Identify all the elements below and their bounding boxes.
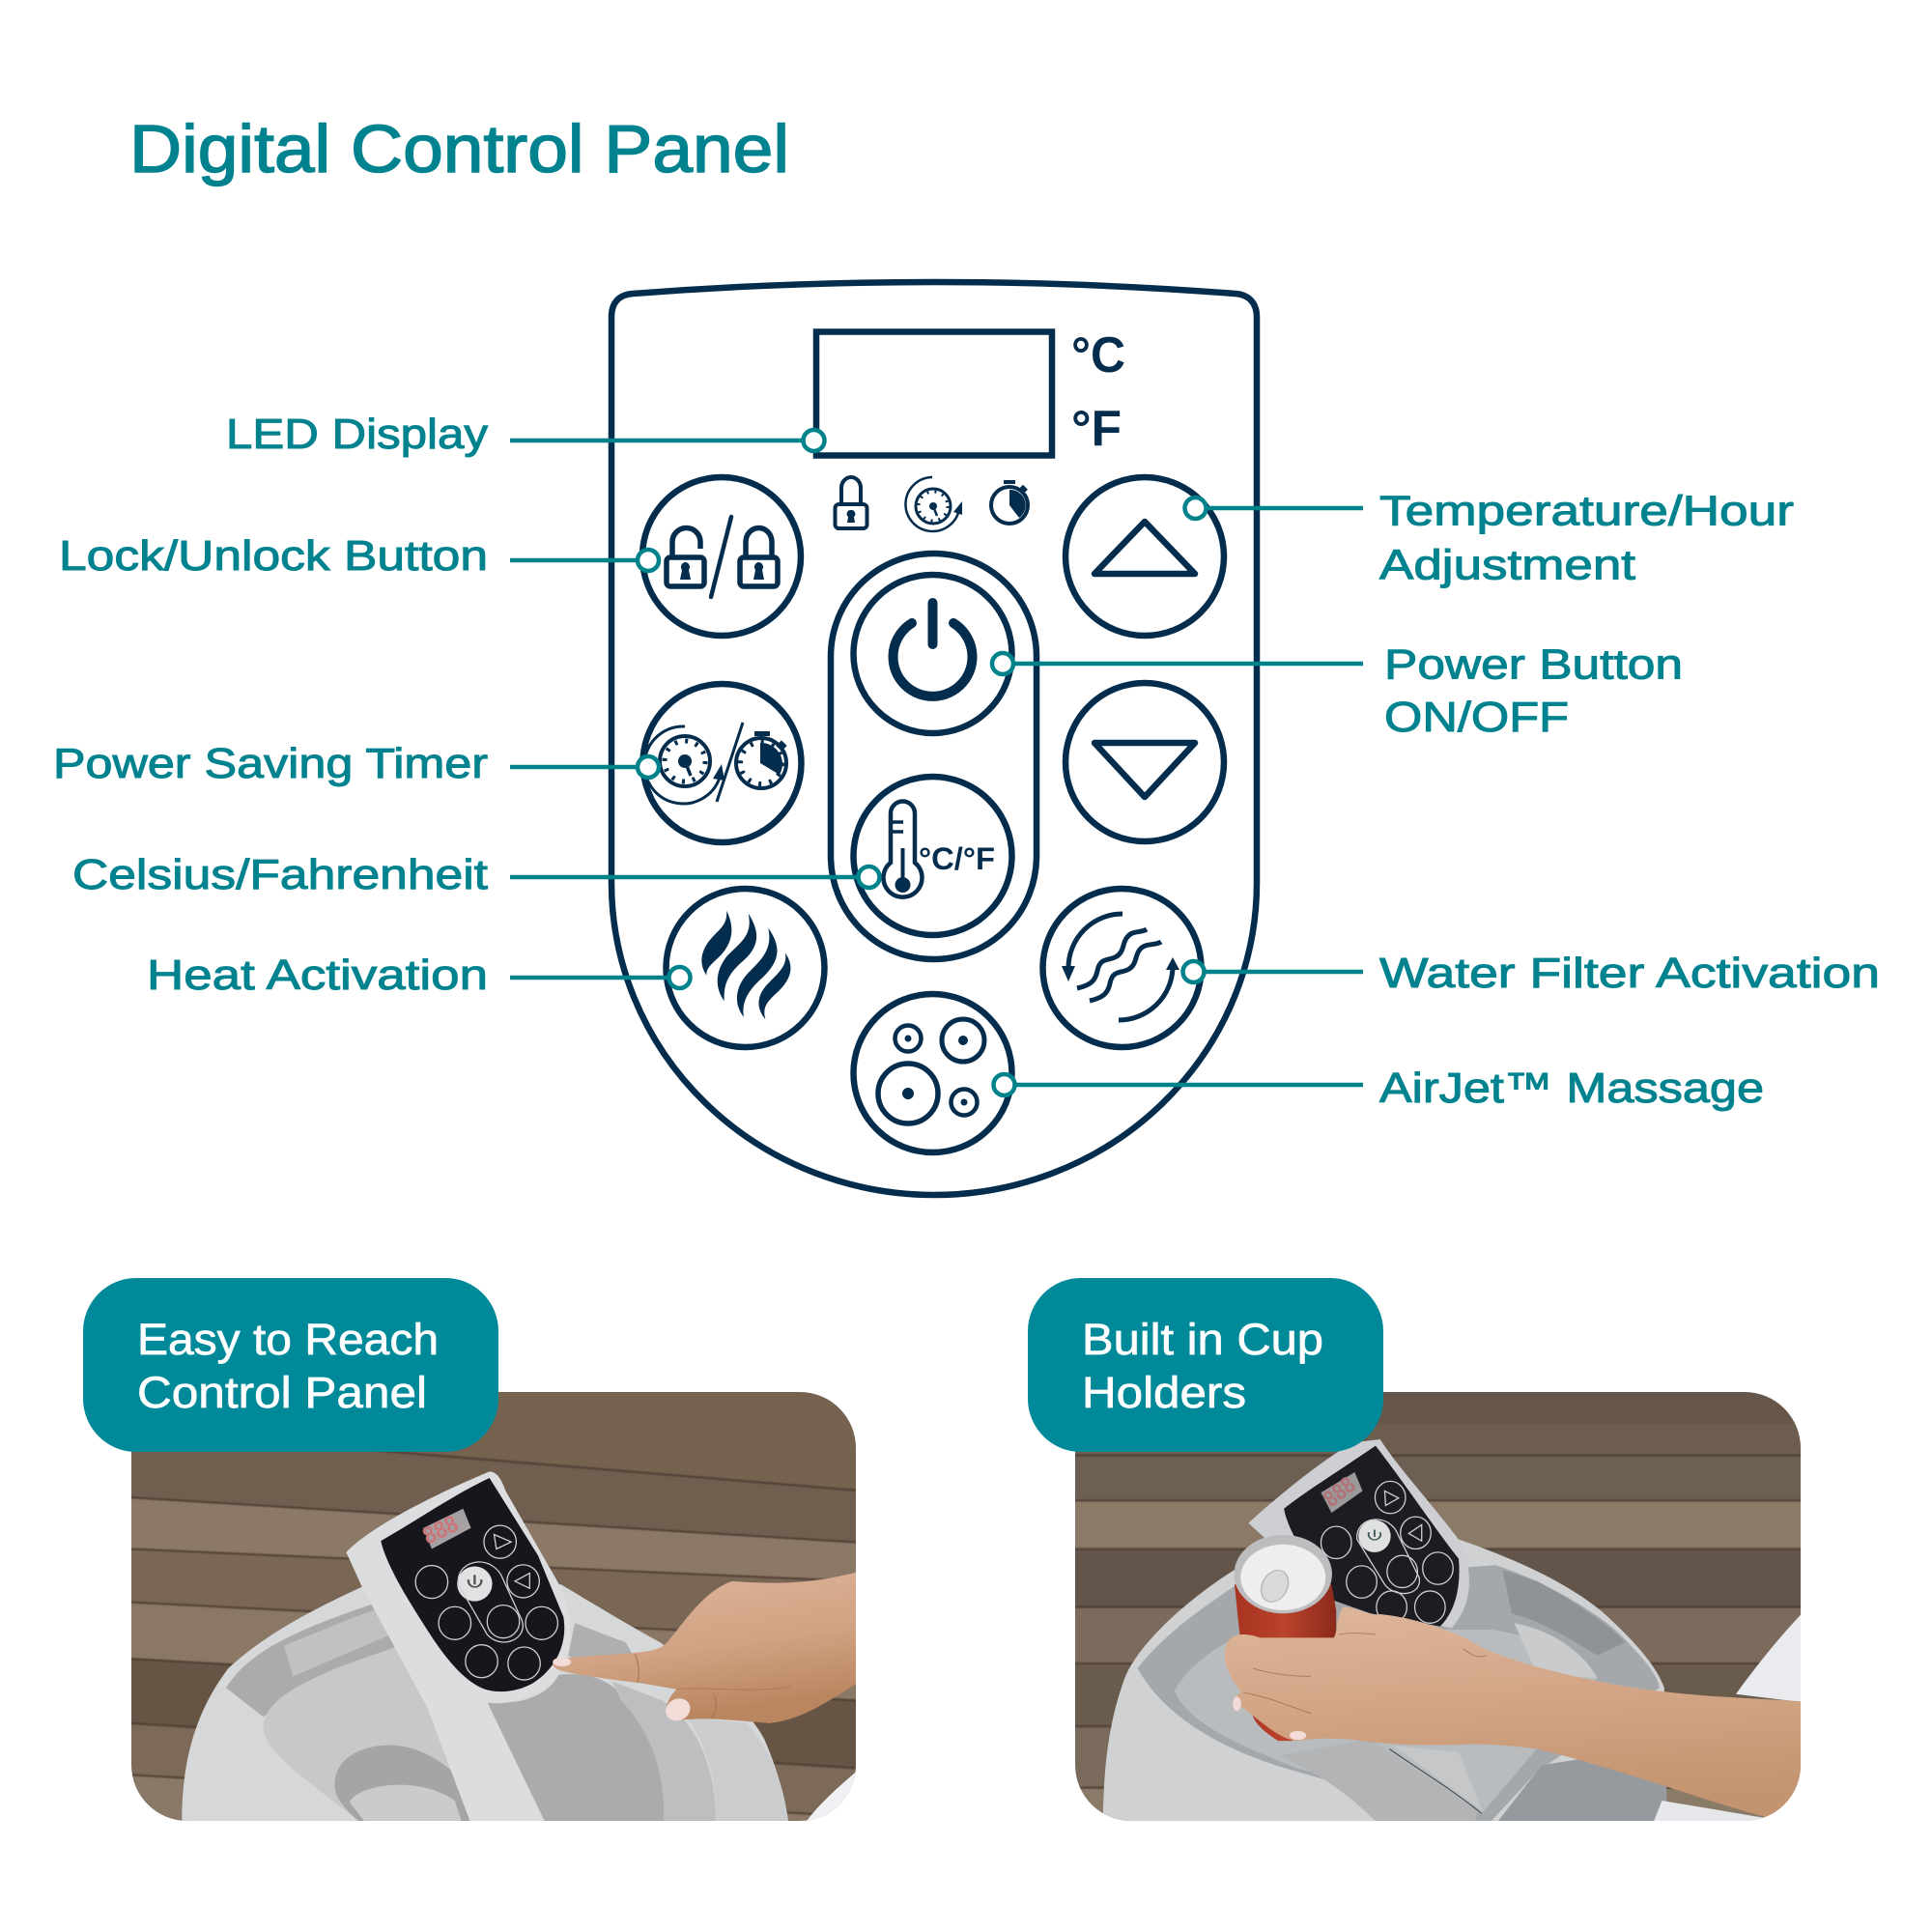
callout: Power Button ON/OFF: ON/OFF	[1384, 694, 1569, 741]
fingernails	[553, 1658, 693, 1722]
button: heat	[667, 889, 825, 1047]
callout: LED Display: LED Display	[226, 411, 488, 458]
tub body	[1103, 1539, 1814, 1836]
button: temperature up	[1065, 477, 1224, 636]
hand creases	[635, 1654, 792, 1719]
panel outline	[611, 282, 1257, 1195]
callout: Heat Activation: Heat Activation	[147, 952, 488, 999]
callout: Power Button ON/OFF: Power Button	[1384, 641, 1683, 688]
badge: Built in Cup Holders: Holders	[1082, 1368, 1246, 1417]
badge: Built in Cup Holders	[1028, 1278, 1383, 1452]
callout: Power Button ON/OFF	[992, 641, 1683, 741]
icon: small stopwatch	[991, 480, 1028, 524]
hand and arm	[1225, 1607, 1814, 1820]
callout: AirJet Massage: AirJet™ Massage	[1379, 1065, 1764, 1112]
unit labels: °C	[1071, 327, 1125, 384]
callout: Temperature/Hour Adjustment: Temperature/Hour	[1379, 487, 1794, 535]
button: lock/unlock	[642, 477, 801, 636]
panel: control panel diagram	[611, 282, 1257, 1195]
button: power saving timer	[643, 684, 802, 842]
callout: Water Filter Activation	[1182, 950, 1880, 997]
icon: small power saving dial	[905, 477, 962, 531]
callout: Water Filter Activation: Water Filter Activation	[1379, 950, 1880, 997]
unit labels	[1071, 327, 1125, 457]
title: Digital Control Panel	[129, 111, 789, 186]
keypad LED window and buttons	[415, 1509, 557, 1680]
callout: Lock/Unlock Button: Lock/Unlock Button	[59, 532, 488, 580]
callout: Lock/Unlock Button	[59, 532, 659, 580]
button: power	[854, 575, 1012, 733]
badge: Easy to Reach Control Panel: Easy to Reach	[137, 1315, 439, 1364]
pedestal and black keypad	[1248, 1439, 1469, 1628]
hand creases	[1244, 1634, 1487, 1714]
callout: LED Display	[226, 411, 825, 458]
wood deck background	[1075, 1392, 1801, 1821]
pedestal and black keypad	[346, 1471, 571, 1836]
icon: small lock indicator	[835, 477, 867, 528]
callout: Power Saving Timer: Power Saving Timer	[53, 740, 488, 787]
callout: Temperature/Hour Adjustment	[1184, 487, 1794, 589]
callout: Celsius/Fahrenheit: Celsius/Fahrenheit	[72, 851, 488, 898]
badge: Built in Cup Holders: Built in Cup	[1082, 1315, 1323, 1364]
button: water filter	[1043, 889, 1202, 1047]
button: celsius/fahrenheit	[854, 777, 1012, 935]
red can	[1235, 1535, 1336, 1741]
LED digits on keypad: 888	[418, 1510, 463, 1549]
LED digits on keypad: 888	[1319, 1472, 1360, 1513]
LED display window	[816, 332, 1052, 456]
unit labels: °F	[1071, 401, 1122, 457]
badge: Easy to Reach Control Panel: Control Panel	[137, 1368, 427, 1417]
photo: finger pressing control panel	[131, 1392, 856, 1821]
callout: Celsius/Fahrenheit	[72, 851, 879, 898]
pointing hand	[553, 1569, 870, 1723]
wood deck background	[131, 1392, 856, 1821]
fingernails	[1233, 1696, 1306, 1740]
photo: hand holding can at cup holder	[1075, 1392, 1801, 1821]
callout: AirJet Massage	[993, 1065, 1764, 1112]
callout: Temperature/Hour Adjustment: Adjustment	[1379, 541, 1635, 589]
badge: Easy to Reach Control Panel	[83, 1278, 498, 1452]
button: temperature down	[1065, 683, 1224, 841]
tub body	[182, 1584, 870, 1836]
dark seam in tub	[1389, 1749, 1482, 1813]
pill around power and unit buttons	[831, 554, 1037, 959]
keypad LED window and buttons	[1321, 1472, 1453, 1623]
button: AirJet massage	[854, 994, 1012, 1152]
callout: Power Saving Timer	[53, 740, 659, 787]
callout: Heat Activation	[147, 952, 690, 999]
button: celsius/fahrenheit: °C/°F	[919, 841, 995, 876]
